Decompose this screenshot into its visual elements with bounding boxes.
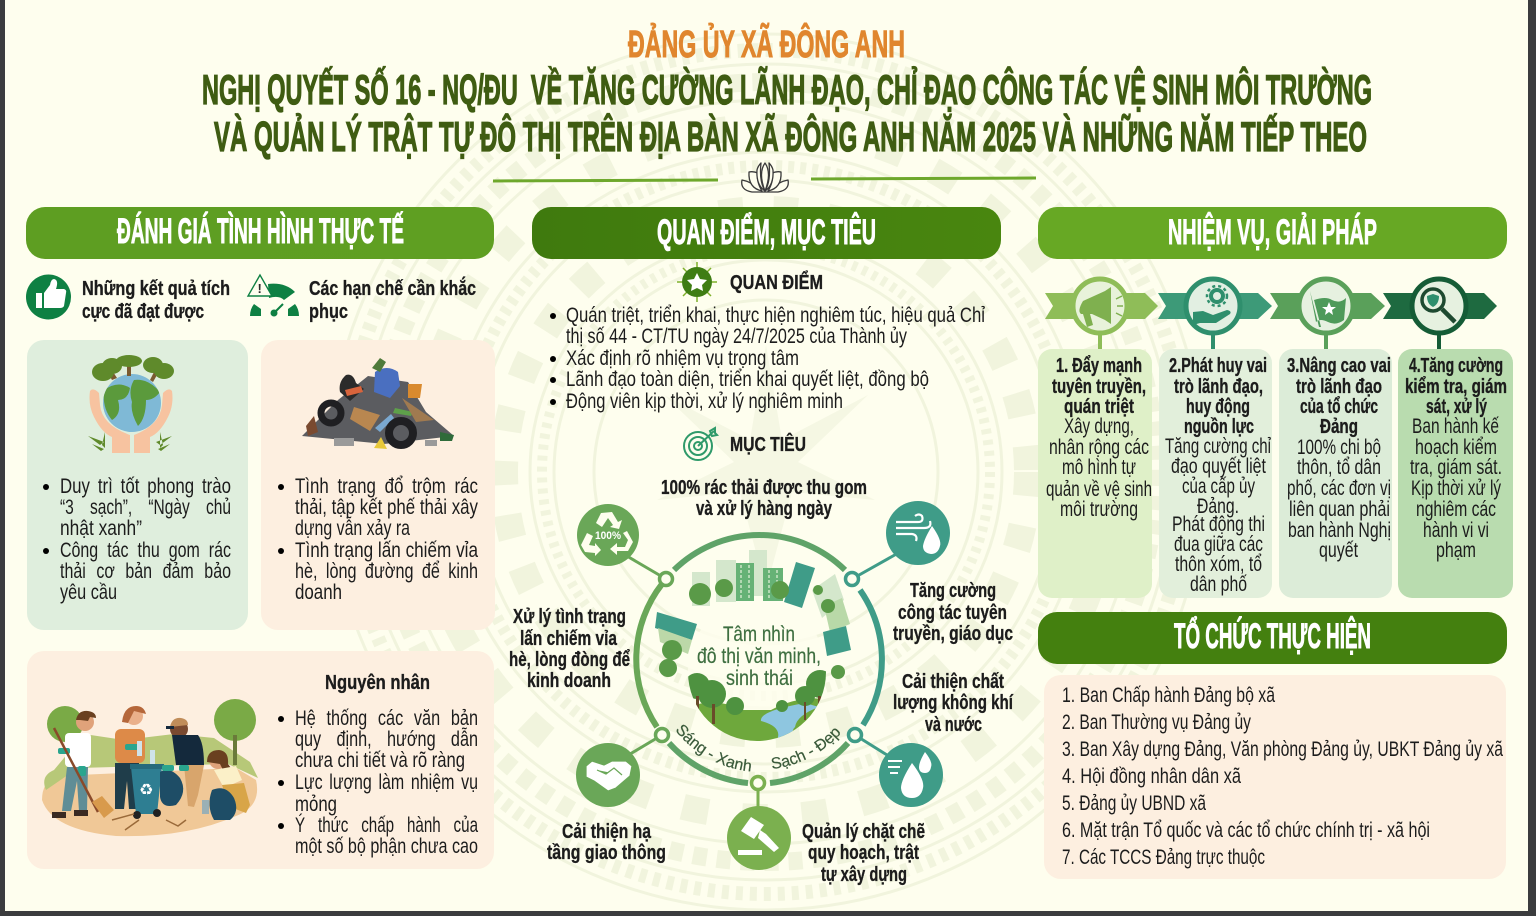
label: goal 6: hè, lòng đòng để [509, 648, 630, 671]
divider with lotus icon [493, 163, 1036, 192]
card: task 4: Kịp thời xử lý [1411, 477, 1501, 500]
text: causes [278, 707, 478, 858]
card: task 4: hoạch kiểm [1415, 436, 1497, 459]
organisation name: ĐẢNG ỦY XÃ ĐÔNG ANH [628, 21, 905, 66]
center text: sinh thái [726, 667, 793, 690]
panel: implementation list: 1. Ban Chấp hành Đảng bộ xã [1062, 684, 1275, 707]
icon: earth in hands [88, 355, 174, 453]
panel: implementation list: 4. Hội đồng nhân dân xã [1062, 765, 1241, 788]
label: goal 4: tự xây dựng [821, 863, 907, 886]
card: task 2: Tăng cường chỉ [1165, 435, 1271, 458]
woman [115, 706, 155, 809]
panel: limitations [261, 340, 495, 630]
recycling bin: ♻ [139, 782, 153, 799]
man with bag [160, 718, 204, 807]
panel: left column [26, 207, 495, 869]
text: limitations: Tình trạng đổ trộm rác [295, 475, 478, 498]
label: goal 5: tầng giao thông [547, 841, 666, 864]
illustration: people collecting litter [42, 699, 258, 836]
card: task 2: 2.Phát huy vai [1169, 354, 1267, 377]
card: task 1: tuyên truyền, [1052, 375, 1146, 398]
subheading: positive results: Những kết quả tích [82, 277, 230, 300]
card: task 1: mô hình tự [1062, 456, 1136, 479]
heading: assessment: ĐÁNH GIÁ TÌNH HÌNH THỰC TẾ [117, 211, 404, 251]
illustration: green city [655, 550, 851, 679]
icon: star with rays [677, 262, 717, 302]
card: task 4: sát, xử lý [1426, 395, 1487, 418]
heading: implementation [1038, 612, 1507, 664]
card: task 3: Đảng [1320, 415, 1358, 438]
card: task 3: thôn, tổ dân [1297, 456, 1381, 479]
label: goal 3 [893, 670, 1014, 736]
card: task 2: của cấp ủy [1182, 475, 1255, 498]
icon: magnifier [1412, 279, 1466, 349]
diagram: goals ring [509, 476, 1014, 886]
card: task 2: thôn xóm, tổ [1175, 553, 1262, 576]
icon: handshake [576, 743, 640, 807]
card: task 3: 3.Nâng cao vai [1287, 354, 1391, 377]
label: goal 4: Quản lý chặt chẽ [802, 820, 925, 843]
heading: goals: MỤC TIÊU [730, 432, 806, 456]
text: positive results: nhật xanh” [60, 517, 142, 540]
icon: megaphone [1073, 279, 1127, 349]
center text [697, 623, 821, 690]
card: task 4: nghiêm các [1416, 498, 1496, 521]
text: causes: Lực lượng làm nhiệm vụ [295, 771, 478, 794]
icon: warning gauge [248, 275, 299, 316]
label: goal 2 [893, 579, 1013, 645]
text: viewpoints: Xác định rõ nhiệm vụ trọng tâm [566, 347, 799, 370]
card: task 4 [1398, 349, 1513, 598]
label: goal 5 [547, 820, 666, 864]
icon: warning gauge: ! [258, 281, 262, 296]
card: task 3: quyết [1319, 539, 1358, 562]
center text: Tâm nhìn [723, 623, 795, 646]
heading: tasks [1038, 207, 1507, 259]
card: task 3: 100% chi bộ [1297, 436, 1381, 459]
label: goal 2: Tăng cường [910, 579, 996, 602]
connectors [620, 552, 900, 815]
card: task 2: nguồn lực [1184, 415, 1254, 438]
subheading: limitations [309, 276, 476, 323]
text: positive results: yêu cầu [60, 581, 117, 604]
text: viewpoints: Quán triệt, triển khai, thực hiện nghiêm túc, hiệu quả Chỉ [566, 304, 985, 327]
icon: recycle [577, 504, 639, 566]
label: goal 6: lấn chiếm vỉa [520, 627, 617, 650]
heading: causes: Nguyên nhân [325, 671, 430, 694]
panel: middle column [509, 207, 1014, 886]
card: task 1: quản về vệ sinh [1046, 478, 1152, 501]
text: causes: Ý thức chấp hành của [295, 814, 478, 837]
icon: recycle: 100% [595, 530, 621, 542]
heading: viewpoints and goals [532, 207, 1001, 259]
ribbon: task steps [1045, 293, 1497, 319]
label: goal 3: Cải thiện chất [902, 670, 1004, 693]
text: viewpoints [550, 304, 985, 413]
icon: hand with gear [1186, 279, 1240, 349]
subheading: limitations: phục [309, 300, 348, 323]
card: task 2: dân phố [1190, 573, 1247, 596]
label: goal 1: 100% rác thải được thu gom [661, 476, 867, 499]
icon: water drops [879, 743, 943, 807]
label: goal 6 [509, 605, 630, 692]
center text: đô thị văn minh, [697, 645, 821, 668]
card: task 2: huy động [1186, 395, 1250, 418]
subheading: positive results: cực đã đạt được [82, 300, 204, 323]
heading: implementation: TỔ CHỨC THỰC HIỆN [1174, 616, 1371, 656]
label: goal 4: quy hoạch, trật [808, 841, 919, 864]
text: limitations: thải, tập kết phế thải xây [295, 496, 478, 519]
card: task 4: tra, giám sát. [1410, 456, 1502, 479]
panel: implementation list: 7. Các TCCS Đảng trực thuộc [1062, 846, 1265, 869]
background emblem: bronze drum [328, 34, 1204, 910]
text: positive results: “3 sạch”, “Ngày chủ [60, 496, 231, 519]
text: limitations: hè, lòng đường để kinh [295, 560, 478, 583]
text: causes: chưa chi tiết và rõ ràng [295, 749, 465, 772]
card: task 3: của tổ chức [1300, 395, 1378, 418]
text: limitations [278, 475, 478, 604]
recycling bin [130, 764, 164, 819]
text: causes: mỏng [295, 793, 337, 816]
card: task 3 [1279, 349, 1392, 598]
card: task 4: hành vi vi [1423, 519, 1489, 542]
card: task 2: đạo quyết liệt [1171, 455, 1266, 478]
illustration: landscape and river [688, 670, 826, 741]
panel: right column [1038, 207, 1513, 879]
panel: implementation list [1044, 675, 1506, 879]
card: task 1 [1038, 349, 1152, 598]
icon: flag with star [1299, 279, 1353, 349]
man with broom [52, 711, 114, 818]
text: causes: Hệ thống các văn bản [295, 707, 478, 730]
curved slogan: Sáng - Xanh [676, 724, 751, 772]
panel: implementation list: 2. Ban Thường vụ Đảng ủy [1062, 711, 1251, 734]
card: task 3: phố, các đơn vị [1287, 477, 1391, 500]
text: viewpoints: thị số 44 - CT/TU ngày 24/7/2025 của Thành ủy [566, 325, 907, 348]
text: viewpoints: Động viên kịp thời, xử lý nghiêm minh [566, 390, 843, 413]
subheading: positive results [82, 277, 230, 323]
text: positive results: thải cơ bản đảm bảo [60, 560, 231, 583]
label: goal 2: truyền, giáo dục [893, 622, 1013, 645]
curved slogan [676, 724, 840, 772]
card: task 2: trò lãnh đạo, [1174, 375, 1263, 398]
text: viewpoints: Lãnh đạo toàn diện, triển khai quyết liệt, đồng bộ [566, 368, 929, 391]
subheading: limitations: Các hạn chế cần khắc [309, 276, 476, 300]
label: goal 6: kinh doanh [527, 669, 611, 692]
panel: positive results [27, 340, 248, 630]
curved slogan: Sạch - Đẹp [772, 728, 840, 769]
heading: tasks: NHIỆM VỤ, GIẢI PHÁP [1168, 212, 1377, 252]
label: goal 5: Cải thiện hạ [562, 820, 651, 843]
label: goal 3: và nước [925, 713, 982, 736]
heading: viewpoints and goals: QUAN ĐIỂM, MỤC TIÊU [657, 212, 876, 252]
icon: thumbs up [26, 274, 71, 320]
icon: gavel [727, 806, 791, 870]
text: causes: một số bộ phận chưa cao [295, 835, 478, 858]
heading: viewpoints: QUAN ĐIỂM [730, 271, 823, 294]
icon: wind and water [886, 501, 950, 565]
card: task 4: Ban hành kế [1412, 415, 1499, 438]
label: goal 1 [661, 476, 867, 520]
icon: target [684, 428, 717, 460]
label: goal 3: lượng không khí [893, 691, 1014, 714]
panel: implementation list: 5. Đảng ủy UBND xã [1062, 792, 1206, 815]
card: task 3: ban hành Nghị [1288, 519, 1391, 542]
text: limitations: dựng vẫn xảy ra [295, 517, 410, 540]
card: task 1: nhân rộng các [1049, 436, 1149, 459]
ring nodes [656, 572, 862, 790]
card: task 1: 1. Đẩy mạnh [1056, 354, 1142, 377]
text: positive results: Công tác thu gom rác [60, 539, 231, 562]
card: task 3: trò lãnh đạo [1296, 375, 1382, 398]
text: positive results: Duy trì tốt phong trào [60, 475, 231, 498]
ring arcs [636, 535, 882, 783]
text: limitations: doanh [295, 581, 342, 604]
card: task 1: quán triệt [1064, 395, 1134, 418]
label: goal 2: công tác tuyên [898, 601, 1007, 624]
woman with bag [202, 750, 250, 820]
text: causes: quy định, hướng dẫn [295, 728, 478, 751]
card: task 2: Phát động thi [1172, 513, 1265, 536]
label: goal 1: và xử lý hàng ngày [696, 497, 832, 520]
panel: implementation list: 6. Mặt trận Tổ quốc và các tổ chức chính trị - xã hội [1062, 819, 1430, 842]
icon: trash pile [302, 358, 454, 449]
card: task 2: Đảng. [1197, 495, 1239, 518]
text: limitations: Tình trạng lấn chiếm vỉa [295, 539, 478, 562]
label: goal 4 [802, 820, 925, 886]
header: organisation and title [202, 21, 1372, 160]
heading: assessment [26, 207, 494, 259]
card: task 2: đua giữa các [1174, 533, 1263, 556]
card: task 1: Xây dựng, [1064, 415, 1134, 438]
center circle [688, 601, 826, 739]
text: positive results [43, 475, 231, 604]
card: task 3: liên quan phải [1289, 498, 1390, 521]
card: task 1: môi trường [1060, 498, 1138, 521]
panel: causes [27, 651, 494, 869]
label: goal 6: Xử lý tình trạng [513, 605, 626, 628]
card: task 2 [1159, 349, 1272, 598]
card: task 4: phạm [1436, 539, 1476, 562]
title [202, 65, 1372, 160]
